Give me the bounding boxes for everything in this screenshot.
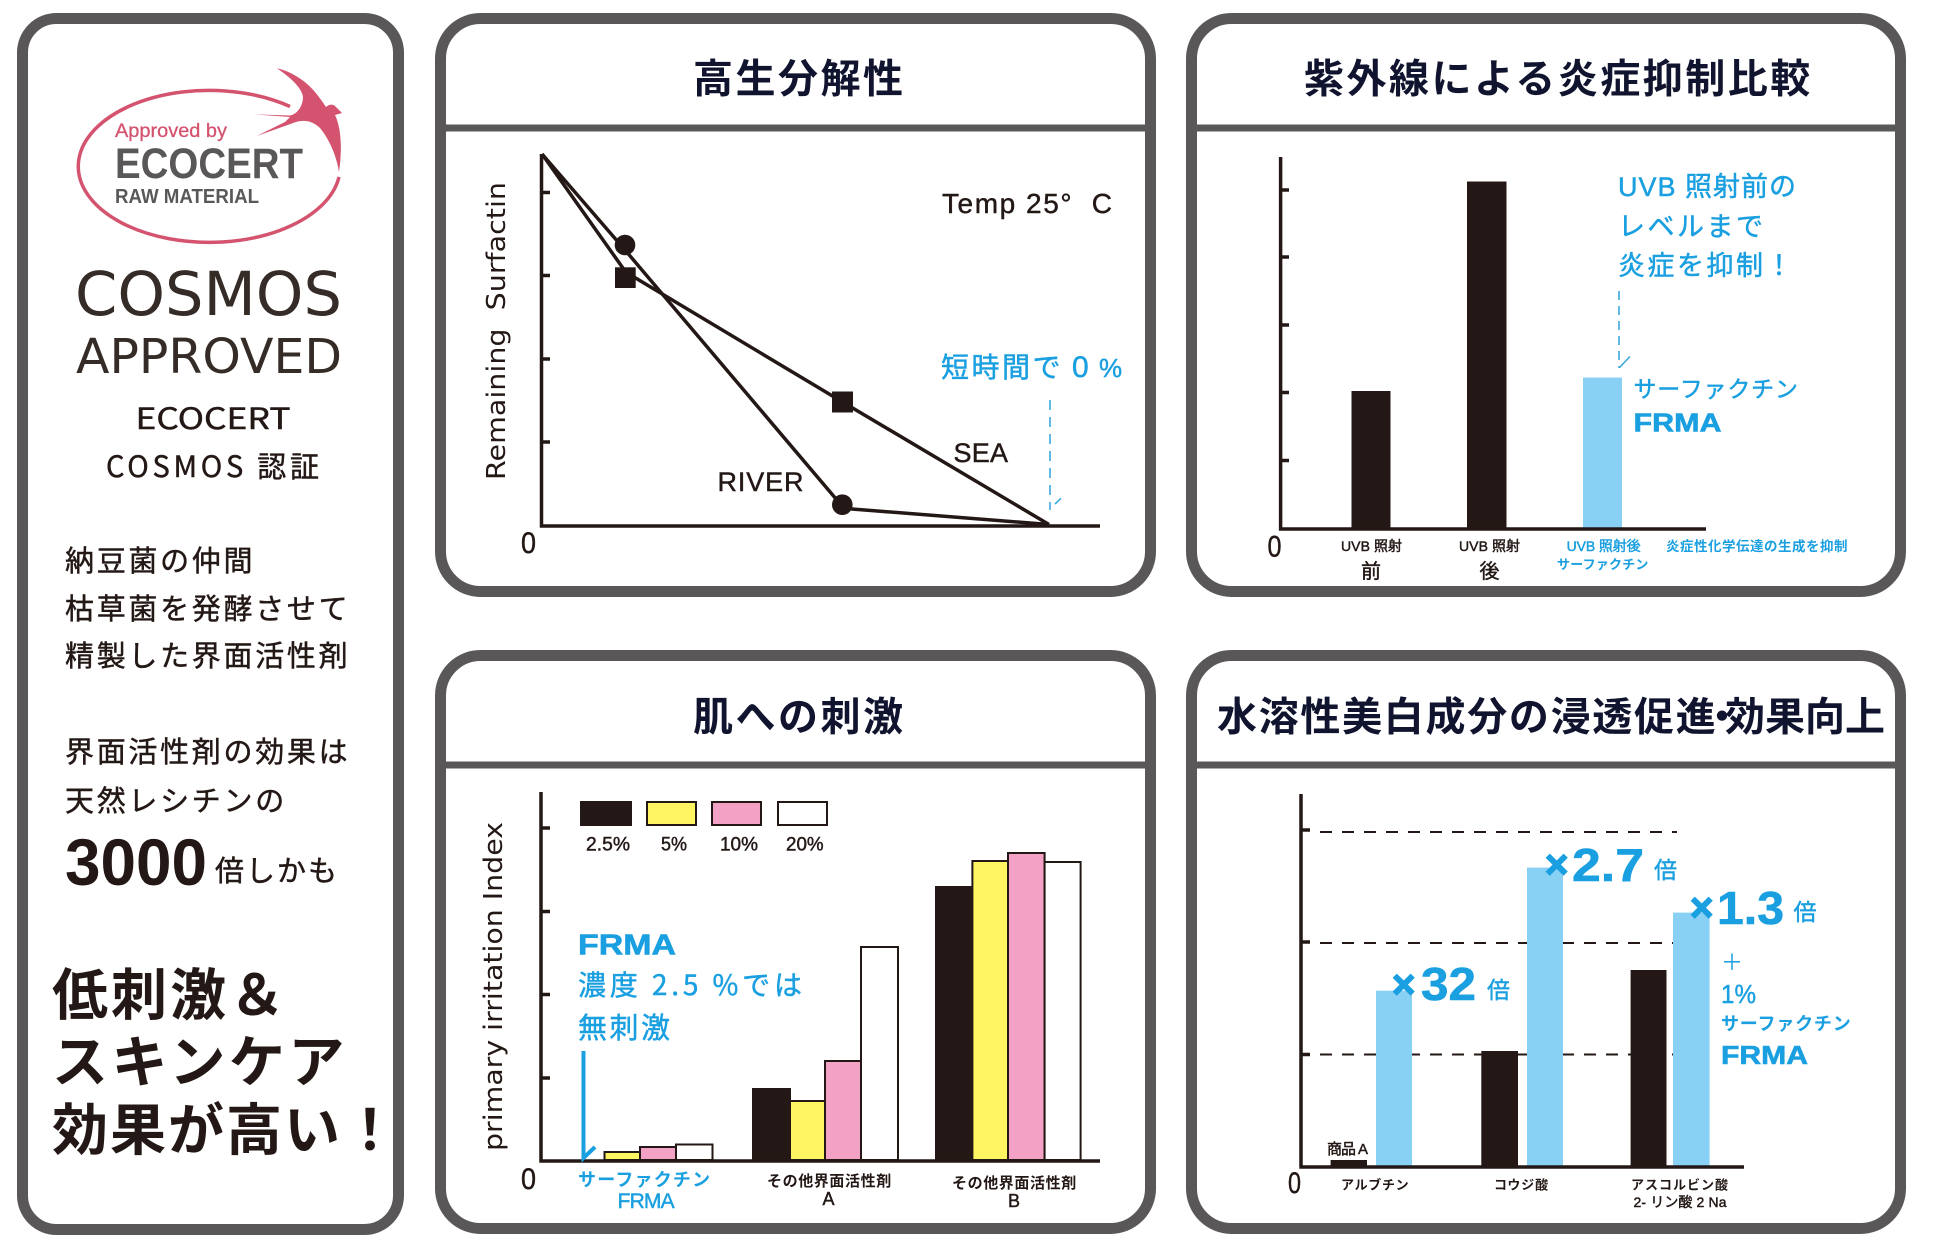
bar chart: primary irritation index: B (1008, 1191, 1020, 1211)
label: surfactin FRMA (1634, 370, 1799, 438)
line chart: remaining surfactin: 0 (521, 527, 536, 560)
bar chart: penetration increase: 0 (1288, 1167, 1301, 1200)
callout: zero percent in a short time: % (1099, 353, 1122, 383)
label: plus 1 percent surfactin FRMA (1721, 945, 1852, 1070)
callout: times 1.3: 倍 (1794, 893, 1816, 927)
label: plus 1 percent surfactin FRMA: 1% (1721, 979, 1756, 1009)
callout: low irritation and high skincare effect: 効果が高い！ (52, 1086, 400, 1167)
callout: times 2.7: × (1545, 843, 1568, 887)
line chart: remaining surfactin: SEA (954, 438, 1008, 468)
text block: description: 枯草菌を発酵させて (65, 586, 350, 628)
text: 3000 times: 倍しかも (215, 848, 339, 890)
label: surfactin FRMA: サーファクチン (1634, 370, 1799, 404)
callout: FRMA non-irritating at 2.5 percent (578, 930, 802, 1158)
callout: zero percent in a short time: 0 (1072, 351, 1089, 384)
bar chart: UVB inflammation: UVB 照射 (1341, 538, 1402, 554)
legend: concentrations: 10% (720, 834, 758, 856)
callout: times 1.3 (1690, 882, 1816, 934)
bar chart: primary irritation index: その他界面活性剤 (952, 1172, 1077, 1193)
bar chart: penetration increase: 商品 A (1327, 1141, 1368, 1158)
text block: description: 界面活性剤の効果は (65, 729, 350, 771)
heading: whitening ingredient penetration: 効果向上 (1725, 684, 1885, 742)
callout: FRMA non-irritating at 2.5 percent: 濃度 2.5 %では (578, 964, 802, 1004)
bar chart: penetration increase: アスコルビン酸 (1631, 1174, 1729, 1194)
heading: UV inflammation comparison: 紫外線による炎症抑制比較 (1304, 46, 1813, 104)
bar chart: UVB inflammation: 後 (1480, 555, 1500, 584)
text: ECOCERT: ECOCERT (136, 396, 290, 438)
bar chart: primary irritation index (479, 792, 1100, 1213)
panel: whitening ingredient penetration (1192, 656, 1900, 1228)
callout: times 1.3: × (1690, 886, 1713, 930)
callout: times 2.7: 2.7 (1572, 839, 1644, 891)
icon: Ecocert swallow logo: RAW MATERIAL (115, 186, 259, 208)
callout: low irritation and high skincare effect (52, 951, 400, 1167)
bar chart: primary irritation index: その他界面活性剤 (767, 1170, 892, 1191)
bar chart: primary irritation index: 0 (521, 1163, 536, 1196)
callout: times 32: 32 (1421, 958, 1476, 1010)
bar chart: primary irritation index: A (822, 1189, 835, 1209)
panel: COSMOS certification and summary (22, 18, 400, 1230)
heading: biodegradability: 高生分解性 (693, 46, 906, 104)
text block: description: 納豆菌の仲間 (65, 538, 255, 580)
heading: skin irritation: 肌への刺激 (693, 684, 906, 742)
callout: times 1.3: 1.3 (1717, 882, 1784, 934)
bar chart: UVB inflammation: UVB 照射後 (1567, 538, 1641, 554)
bar chart: primary irritation index: primary irritation Index (479, 822, 509, 1151)
label: surfactin FRMA: FRMA (1634, 408, 1722, 438)
label: plus 1 percent surfactin FRMA: ＋ (1721, 945, 1743, 977)
legend: concentrations: 20% (786, 834, 824, 856)
bar chart: UVB inflammation: 炎症性化学伝達の生成を抑制 (1666, 535, 1848, 555)
callout: inflammation suppressed to pre-UVB level: UVB 照射前の (1618, 172, 1796, 202)
arrow: pointing to FRMA bars (584, 1051, 595, 1158)
text: 3000 times: 3000 (65, 825, 207, 899)
callout: inflammation suppressed to pre-UVB level: 炎症を抑制！ (1618, 244, 1795, 283)
icon: Ecocert swallow logo: Approved by (115, 121, 228, 142)
label: plus 1 percent surfactin FRMA: FRMA (1721, 1040, 1808, 1070)
bar chart: penetration increase: コウジ酸 (1494, 1174, 1549, 1194)
bar chart: UVB inflammation: 前 (1361, 555, 1381, 584)
line chart: remaining surfactin (482, 154, 1112, 560)
label: plus 1 percent surfactin FRMA: サーファクチン (1721, 1010, 1852, 1036)
callout: times 2.7 (1545, 839, 1677, 891)
callout: inflammation suppressed to pre-UVB level: レベルまで (1618, 205, 1766, 244)
bar chart: UVB inflammation: サーファクチン (1557, 554, 1649, 573)
bar chart: primary irritation index: サーファクチン (578, 1166, 711, 1192)
text block: description (65, 538, 350, 820)
text: COSMOS certification: COSMOS 認証 (106, 444, 319, 486)
bar chart: penetration increase: アルブチン (1341, 1174, 1409, 1194)
bar chart: penetration increase (1288, 794, 1744, 1210)
panel: UV inflammation comparison (1192, 18, 1900, 592)
panel: biodegradability (440, 18, 1150, 592)
text: 3000 times (65, 825, 339, 899)
callout: FRMA non-irritating at 2.5 percent: 無刺激 (578, 1005, 673, 1047)
callout: zero percent in a short time: 短時間で (941, 346, 1063, 386)
callout: zero percent in a short time (941, 346, 1122, 510)
heading: whitening ingredient penetration: 水溶性美白成分の浸透促進 (1217, 684, 1717, 742)
bar chart: UVB inflammation (1268, 157, 1848, 584)
callout: times 32: × (1392, 963, 1415, 1007)
heading: whitening ingredient penetration: ・ (1702, 684, 1742, 742)
text block: description: 天然レシチンの (65, 778, 287, 820)
callout: times 32 (1392, 958, 1510, 1010)
bar chart: penetration increase: 2- リン酸 2 Na (1634, 1194, 1727, 1210)
line chart: remaining surfactin: Remaining Surfactin (482, 182, 512, 480)
callout: low irritation and high skincare effect: スキンケア (52, 1018, 348, 1099)
heading: APPROVED: APPROVED (76, 329, 342, 385)
icon: Ecocert swallow logo: ECOCERT (115, 140, 303, 188)
callout: inflammation suppressed to pre-UVB level (1618, 172, 1796, 368)
callout: times 2.7: 倍 (1654, 851, 1677, 885)
bar chart: UVB inflammation: 0 (1268, 530, 1282, 564)
line chart: remaining surfactin: Temp 25° C (942, 188, 1112, 219)
bar chart: UVB inflammation: UVB 照射 (1459, 538, 1520, 554)
icon: Ecocert swallow logo (78, 68, 342, 242)
text block: description: 精製した界面活性剤 (65, 633, 350, 675)
legend: concentrations: 5% (661, 834, 687, 856)
callout: low irritation and high skincare effect: 低刺激＆ (52, 951, 288, 1032)
line chart: remaining surfactin: RIVER (718, 467, 804, 497)
callout: times 32: 倍 (1487, 971, 1510, 1005)
legend: concentrations (581, 802, 827, 856)
panel: skin irritation (440, 656, 1150, 1228)
heading: COSMOS: COSMOS (75, 259, 342, 330)
callout: FRMA non-irritating at 2.5 percent: FRMA (578, 930, 676, 962)
bar chart: primary irritation index: FRMA (618, 1190, 675, 1213)
legend: concentrations: 2.5% (586, 834, 630, 856)
